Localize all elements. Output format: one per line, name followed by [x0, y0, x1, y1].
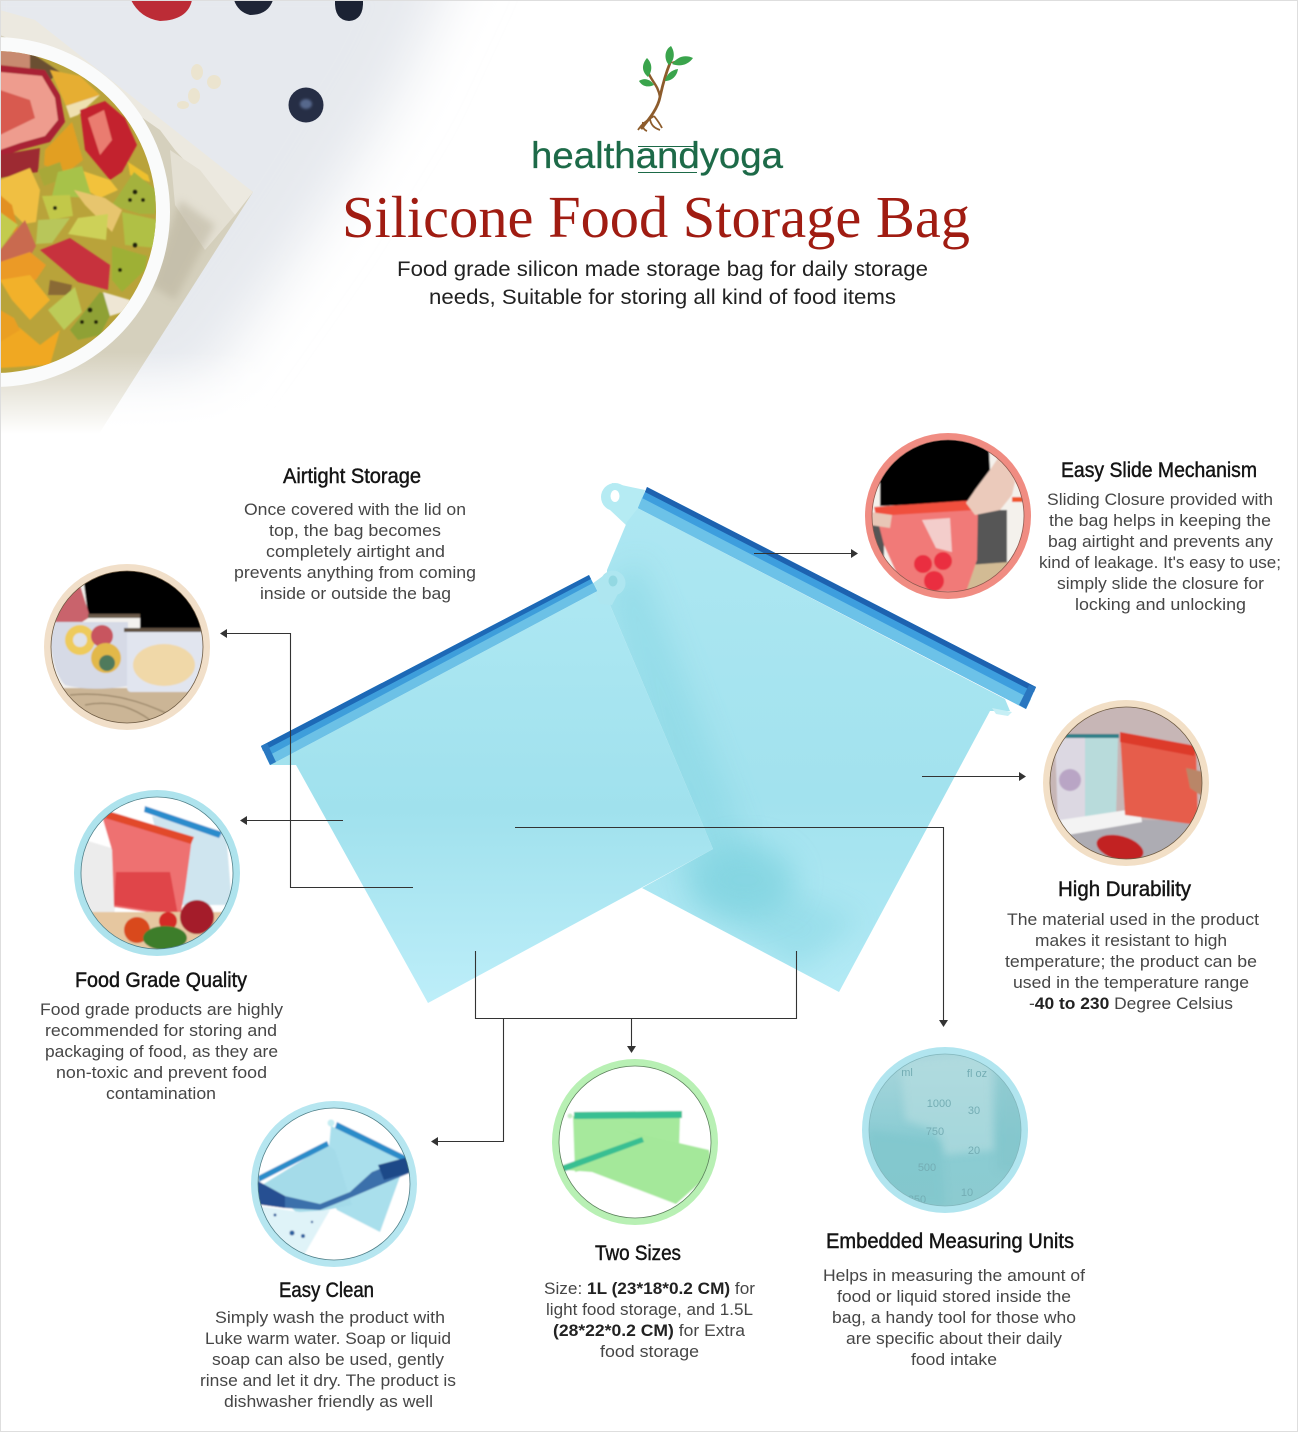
connector: easy slide mechanism — [754, 549, 858, 558]
connector: two sizes — [476, 951, 796, 1053]
product: two blue silicone bags — [261, 483, 1036, 1003]
photo circle: embedded measuring units: 750 — [926, 1126, 944, 1138]
heading: easy clean: Easy Clean — [279, 1279, 374, 1302]
photo circle: two bag sizes — [552, 1059, 718, 1225]
blueberry top centre — [234, 0, 273, 15]
photo circle: embedded measuring units: 250 — [908, 1194, 926, 1206]
photo circle: airtight storage — [44, 564, 210, 730]
body: embedded measuring units: Helps in measuring the amount of — [823, 1266, 1085, 1285]
photo circle: embedded measuring units: ml — [901, 1067, 913, 1079]
photo: fruit bowl on napkin — [1, 1, 453, 424]
white bowl — [0, 37, 170, 387]
photo circle: embedded measuring units: fl oz — [967, 1068, 987, 1080]
title: Silicone Food Storage Bag — [342, 184, 970, 250]
heading: food grade quality: Food Grade Quality — [75, 969, 247, 992]
body: food grade quality — [40, 1000, 284, 1103]
oats — [177, 64, 221, 109]
photo circle: embedded measuring units: 30 — [968, 1105, 980, 1117]
heading: airtight storage: Airtight Storage — [283, 465, 421, 488]
heading: two sizes: Two Sizes — [595, 1242, 681, 1265]
body: high durability: -40 to 230 Degree Celsius — [1029, 994, 1233, 1013]
blueberry — [288, 88, 324, 122]
body: food grade quality: recommended for storing and — [45, 1021, 277, 1040]
photo circle: high durability — [1043, 700, 1209, 866]
photo circle: embedded measuring units: 1000 — [927, 1098, 951, 1110]
body: airtight storage — [234, 500, 476, 603]
body: easy clean: Simply wash the product with — [215, 1308, 445, 1327]
body: airtight storage: top, the bag becomes — [269, 521, 441, 540]
logo wordmark: healthandyoga — [531, 135, 783, 176]
body: easy slide mechanism — [1039, 490, 1281, 614]
body: two sizes: (28*22*0.2 CM) for Extra — [553, 1321, 746, 1340]
heading: high durability: High Durability — [1058, 878, 1191, 901]
body: embedded measuring units: bag, a handy tool for those who — [832, 1308, 1076, 1327]
photo circle: food grade quality — [74, 790, 240, 956]
photo circle: food bag under water — [251, 1101, 417, 1267]
body: high durability: The material used in the product — [1007, 910, 1259, 929]
body: two sizes: Size: 1L (23*18*0.2 CM) for — [544, 1279, 755, 1298]
text block: easy clean — [200, 1279, 456, 1411]
body: easy slide mechanism: the bag helps in keeping the — [1049, 511, 1271, 530]
napkin — [0, 10, 253, 440]
subtitle: Food grade silicon made storage bag for daily storage — [397, 258, 928, 281]
text block: high durability — [1005, 878, 1259, 1013]
connector: high durability — [922, 772, 1026, 781]
body: embedded measuring units — [823, 1266, 1085, 1369]
body: easy clean: Luke warm water. Soap or liquid — [205, 1329, 451, 1348]
body: two sizes: food storage — [600, 1342, 699, 1361]
body: easy slide mechanism: bag airtight and prevents any — [1048, 532, 1274, 551]
text block: airtight storage — [234, 465, 476, 603]
connector: airtight storage — [220, 629, 413, 888]
body: high durability — [1005, 910, 1259, 1013]
body: easy clean: rinse and let it dry. The product is — [200, 1371, 456, 1390]
strawberry top — [131, 0, 192, 21]
body: embedded measuring units: are specific about their daily — [846, 1329, 1063, 1348]
heading: embedded measuring units: Embedded Measuring Units — [826, 1230, 1074, 1253]
photo circle: embedded measuring units — [862, 1047, 1028, 1213]
connector: embedded measuring units — [515, 828, 948, 1027]
body: easy slide mechanism: simply slide the closure for — [1057, 574, 1264, 593]
body: airtight storage: prevents anything from coming — [234, 563, 476, 582]
subtitle: needs, Suitable for storing all kind of food items — [429, 286, 896, 309]
logo: healthandyoga — [531, 46, 783, 176]
body: two sizes — [544, 1279, 755, 1361]
body: food grade quality: non-toxic and prevent food — [56, 1063, 267, 1082]
body: food grade quality: contamination — [106, 1084, 216, 1103]
body: easy clean: dishwasher friendly as well — [224, 1392, 433, 1411]
fruit pieces — [0, 50, 158, 368]
text block: food grade quality — [40, 969, 284, 1103]
body: easy slide mechanism: locking and unlocking — [1075, 595, 1246, 614]
body: high durability: temperature; the product can be — [1005, 952, 1257, 971]
text block: embedded measuring units — [823, 1230, 1085, 1369]
connector: food grade quality — [240, 816, 343, 825]
body: easy slide mechanism: Sliding Closure provided with — [1047, 490, 1273, 509]
photo circle: embedded measuring units: 500 — [918, 1162, 936, 1174]
connector: easy clean — [431, 1018, 504, 1146]
body: airtight storage: completely airtight and — [266, 542, 445, 561]
body: high durability: makes it resistant to high — [1035, 931, 1227, 950]
heading: easy slide mechanism: Easy Slide Mechanism — [1061, 459, 1257, 482]
body: airtight storage: inside or outside the bag — [260, 584, 451, 603]
blueberry top right — [335, 0, 363, 21]
body: food grade quality: packaging of food, as they are — [45, 1042, 278, 1061]
left bag — [261, 570, 713, 1003]
body: embedded measuring units: food or liquid stored inside the — [837, 1287, 1071, 1306]
photo circle: embedded measuring units: 20 — [968, 1145, 980, 1157]
body: two sizes: light food storage, and 1.5L — [546, 1300, 753, 1319]
body: airtight storage: Once covered with the lid on — [244, 500, 466, 519]
body: food grade quality: Food grade products are highly — [40, 1000, 284, 1019]
text block: easy slide mechanism — [1039, 459, 1281, 614]
body: embedded measuring units: food intake — [911, 1350, 997, 1369]
photo circle: easy slide mechanism — [865, 430, 1031, 599]
body: high durability: used in the temperature range — [1013, 973, 1249, 992]
right bag — [601, 483, 1036, 992]
body: easy clean: soap can also be used, gently — [212, 1350, 445, 1369]
body: easy slide mechanism: kind of leakage. It's easy to use; — [1039, 553, 1281, 572]
body: easy clean — [200, 1308, 456, 1411]
logo plant — [638, 46, 693, 131]
subtitle — [397, 258, 928, 309]
text block: two sizes — [544, 1242, 755, 1361]
photo circle: embedded measuring units: 10 — [961, 1187, 973, 1199]
